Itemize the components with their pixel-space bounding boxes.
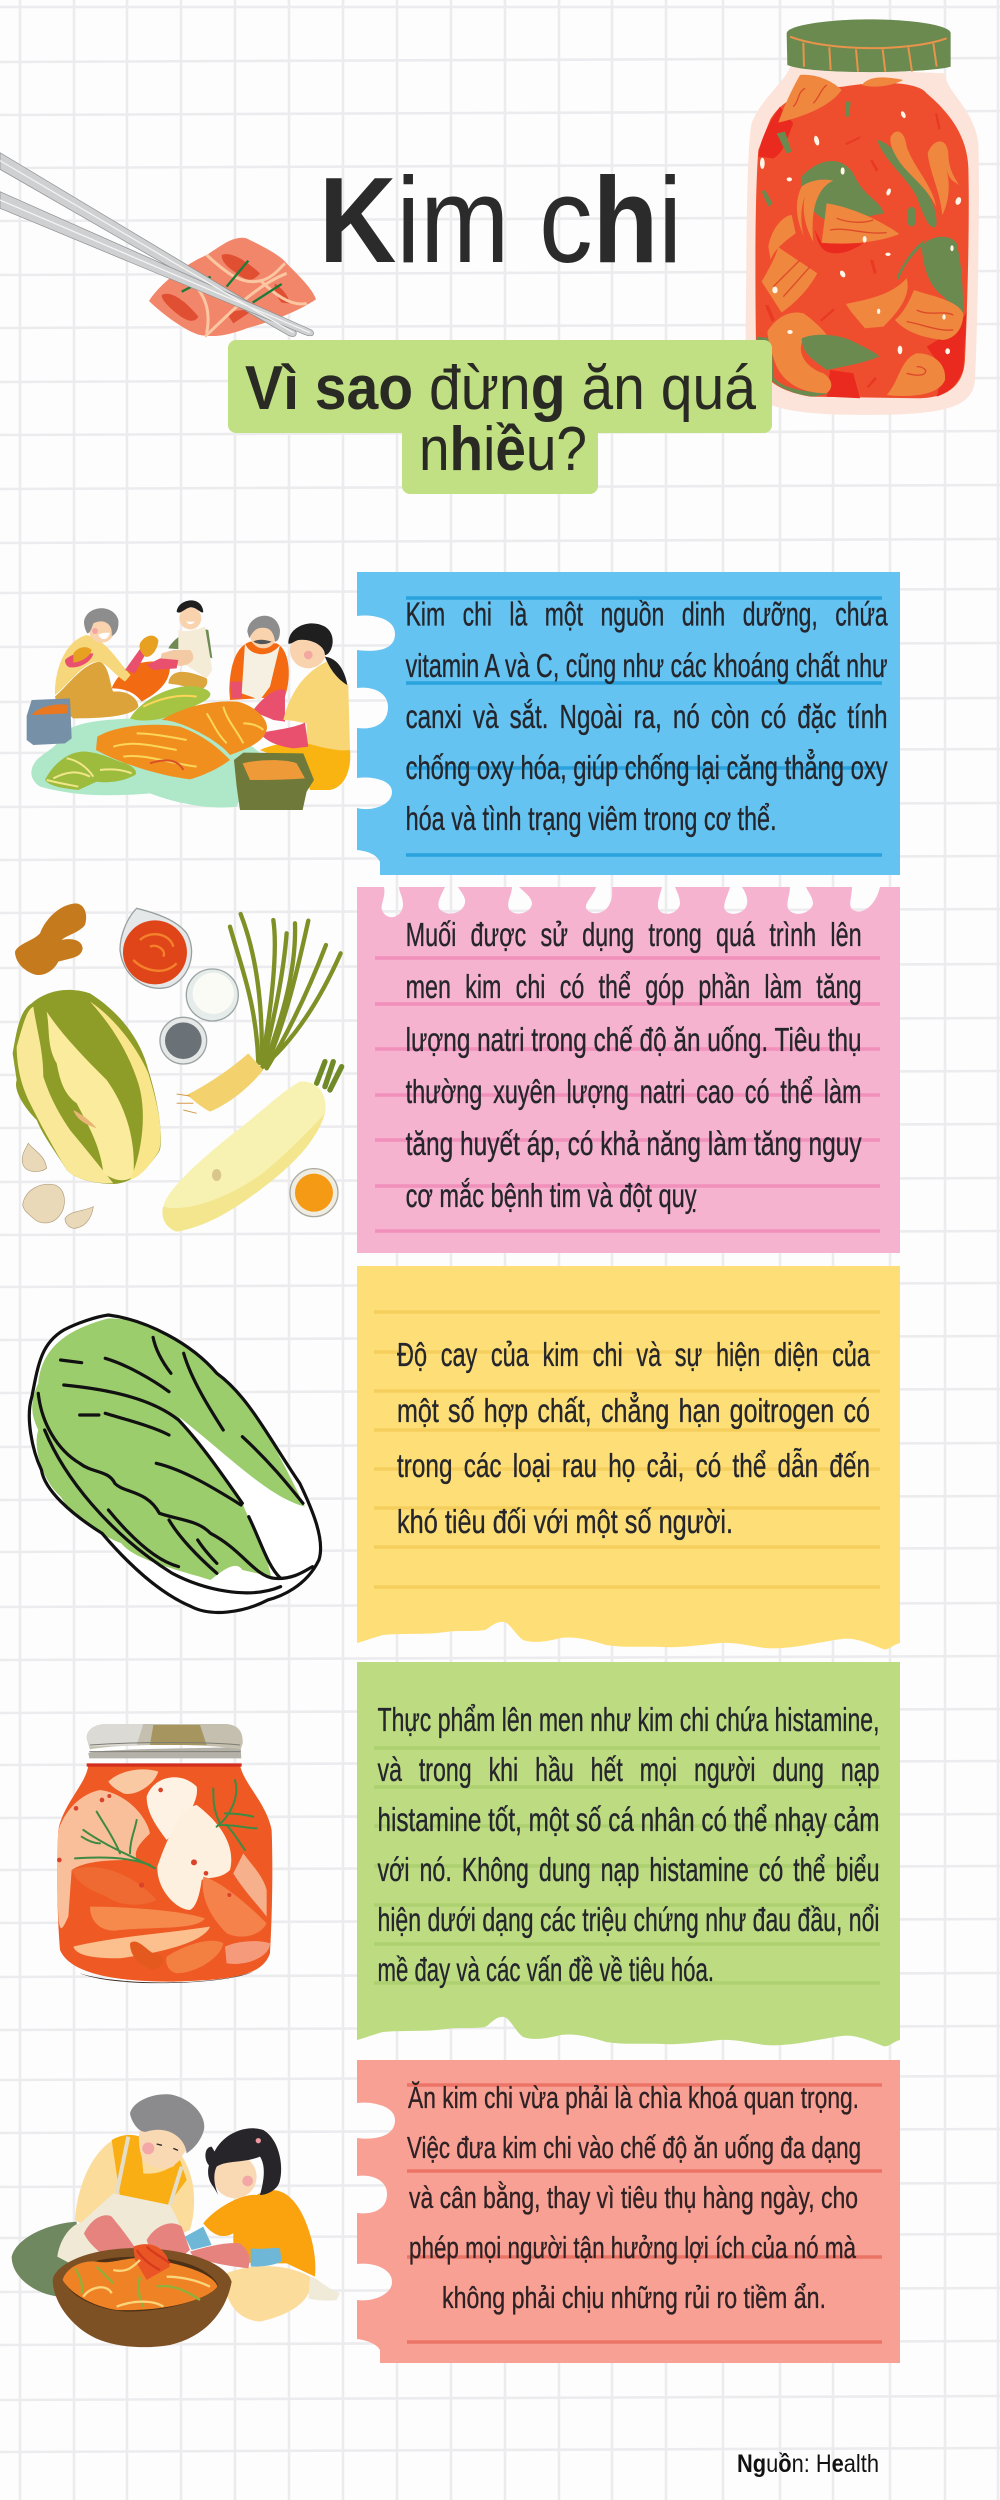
person: grandmother	[12, 2094, 204, 2297]
icon: chili paste bowl	[120, 908, 192, 988]
source credit: Nguồn: Health	[737, 2450, 879, 2478]
title: Kim chi	[319, 152, 682, 288]
icon: family making kimchi	[27, 600, 350, 810]
box: olive green	[234, 753, 314, 810]
panel: blue note	[357, 572, 900, 875]
person: young woman in yellow	[260, 623, 350, 790]
person: older woman with orange sleeves	[229, 616, 289, 722]
panel: salmon note	[357, 2060, 900, 2363]
icon: napa cabbage	[13, 990, 161, 1184]
icon: salt bowl	[186, 969, 238, 1021]
person: man with apron	[147, 600, 212, 692]
cabbage on cloth	[45, 752, 136, 790]
icon: chopsticks holding kimchi	[0, 153, 316, 337]
icon: orange paste bowl	[290, 1169, 338, 1217]
icon: garlic cloves	[22, 1143, 93, 1228]
icon: watercolor kimchi jar	[57, 1724, 272, 1983]
icon: green onion	[177, 914, 341, 1113]
icon: green cabbage outline	[29, 1315, 321, 1612]
panel: pink note	[357, 887, 900, 1253]
icon: kimchi jar with green lid	[745, 19, 979, 415]
subtitle: green label: Vì sao đừng ăn quá	[245, 354, 756, 423]
subtitle: green label: nhiều?	[419, 415, 587, 484]
icon: kimchi slice	[149, 238, 316, 337]
icon: grandmother and child making kimchi	[12, 2094, 340, 2347]
bowl of kimchi	[53, 2244, 232, 2347]
panel: yellow note: khó tiêu đối với một số người.	[397, 1503, 733, 1540]
panel: yellow note	[357, 1266, 900, 1649]
kimchi pile	[96, 686, 267, 779]
panel: blue note: hóa và tình trạng viêm trong cơ thể.	[406, 800, 777, 837]
icon: kimchi ingredients	[13, 903, 342, 1232]
panel: pink note: cơ mắc bệnh tim và đột quỵ	[406, 1177, 697, 1214]
person: seated woman left	[55, 608, 158, 718]
person: child	[185, 2128, 340, 2322]
icon: ginger	[15, 903, 86, 975]
icon: daikon radish	[162, 1062, 342, 1232]
panel: green note: mề đay và các vấn đề về tiêu hóa.	[378, 1951, 714, 1988]
panel: salmon note: không phải chịu những rủi ro tiềm ẩn.	[442, 2280, 826, 2315]
subtitle: green label	[228, 340, 772, 494]
box: gray blue	[27, 698, 72, 745]
icon: black sesame bowl	[160, 1017, 207, 1064]
panel: green note	[357, 1662, 900, 2046]
panel: salmon note: và cân bằng, thay vì tiêu thụ hàng ngày, cho	[409, 2180, 858, 2215]
